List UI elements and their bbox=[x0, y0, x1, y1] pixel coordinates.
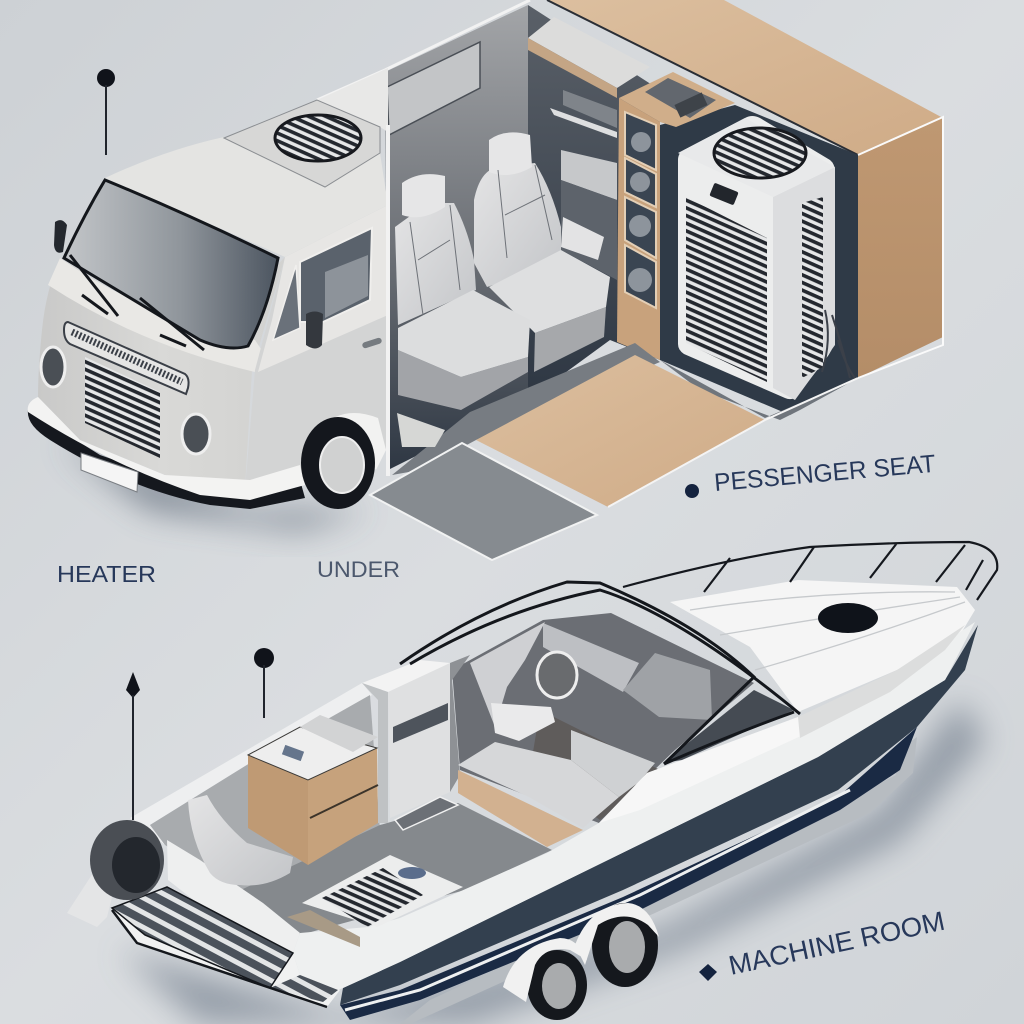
wheel bbox=[300, 413, 386, 478]
foredeck bbox=[670, 580, 975, 712]
wood cabinet bbox=[248, 715, 378, 865]
lower hull stripes bbox=[340, 727, 917, 1020]
trailer rail bbox=[400, 737, 917, 1024]
heater cables bbox=[822, 310, 855, 378]
lower grille bbox=[85, 357, 160, 458]
heater body bbox=[678, 116, 835, 399]
engine hatch vent bbox=[287, 855, 463, 947]
callout: boat pin left bbox=[126, 672, 140, 820]
heater top fan bbox=[714, 128, 806, 178]
panel: boat cutaway bbox=[67, 542, 997, 1024]
van side bbox=[245, 205, 388, 490]
license plate bbox=[81, 453, 138, 492]
cockpit interior bbox=[452, 613, 754, 823]
wood ceiling panel bbox=[547, 0, 943, 155]
alcove bbox=[528, 5, 660, 400]
swim platform bbox=[112, 887, 340, 1007]
boat ground shadow bbox=[120, 700, 985, 1024]
windshield frame bbox=[400, 582, 800, 764]
door seam bbox=[386, 125, 390, 476]
trailer wheels bbox=[503, 903, 659, 1020]
van interior back wall bbox=[385, 5, 528, 470]
carpet floor bbox=[230, 803, 552, 935]
headlights bbox=[41, 347, 65, 387]
left gunwale and inner wall bbox=[130, 683, 372, 845]
side window bbox=[300, 228, 372, 322]
small item on floor bbox=[397, 413, 445, 447]
side fairing bbox=[599, 717, 803, 823]
ground shadow bbox=[60, 440, 370, 530]
deck hatch bbox=[818, 603, 878, 633]
cockpit side panel bbox=[450, 655, 470, 792]
roof bbox=[105, 137, 388, 257]
front passenger seat bbox=[395, 174, 530, 410]
callout: pin top left bbox=[97, 69, 115, 155]
van front bbox=[38, 257, 285, 488]
driver seat rear and stern bench bbox=[167, 795, 300, 953]
roof fan housing bbox=[224, 100, 380, 187]
floor carpet bbox=[392, 343, 660, 475]
heater side grille bbox=[802, 197, 823, 378]
vent mat bbox=[395, 797, 458, 830]
label: under: UNDER bbox=[317, 557, 400, 582]
wood wall right bbox=[858, 117, 943, 378]
upper bunk cushion bbox=[528, 17, 650, 88]
door handle bbox=[362, 337, 382, 349]
van body bbox=[28, 68, 388, 509]
heater display bbox=[709, 183, 739, 205]
bumper bbox=[28, 397, 305, 500]
heater front grille bbox=[686, 197, 767, 382]
label: heater: HEATER bbox=[57, 561, 156, 587]
mirrors bbox=[54, 220, 67, 253]
rear roof strip bbox=[317, 68, 388, 132]
label: passenger seat: PESSENGER SEAT bbox=[713, 450, 937, 497]
callout: boat pin right bbox=[254, 648, 274, 718]
wood floor bbox=[476, 355, 765, 507]
steering wheel bbox=[537, 652, 577, 698]
fore seats bbox=[470, 622, 639, 741]
floor mat bbox=[370, 443, 597, 560]
windshield glass bbox=[663, 690, 794, 763]
bench bbox=[458, 730, 655, 847]
panel: van cutaway bbox=[28, 0, 943, 560]
wipers bbox=[70, 255, 204, 350]
outboard motor bbox=[67, 820, 164, 927]
label: machine room: MACHINE ROOM bbox=[726, 906, 947, 981]
black bumper underside bbox=[28, 410, 305, 509]
rear passenger seat bbox=[474, 132, 610, 372]
front badge grille bbox=[64, 322, 189, 394]
shelf compartments bbox=[625, 112, 656, 308]
bow rail bbox=[623, 542, 997, 600]
wall window bbox=[387, 42, 480, 135]
wooden shelf unit bbox=[617, 72, 735, 360]
roof edge line bbox=[317, 0, 530, 100]
hull white band bbox=[293, 622, 975, 990]
dashboard bbox=[623, 653, 712, 720]
shelf bbox=[550, 108, 617, 138]
windshield bbox=[64, 180, 278, 348]
partition bbox=[362, 660, 450, 823]
hull navy bbox=[340, 625, 978, 1005]
dark cavity behind heater bbox=[660, 105, 858, 415]
heater unit bbox=[678, 116, 855, 400]
front edge lines bbox=[608, 378, 858, 507]
